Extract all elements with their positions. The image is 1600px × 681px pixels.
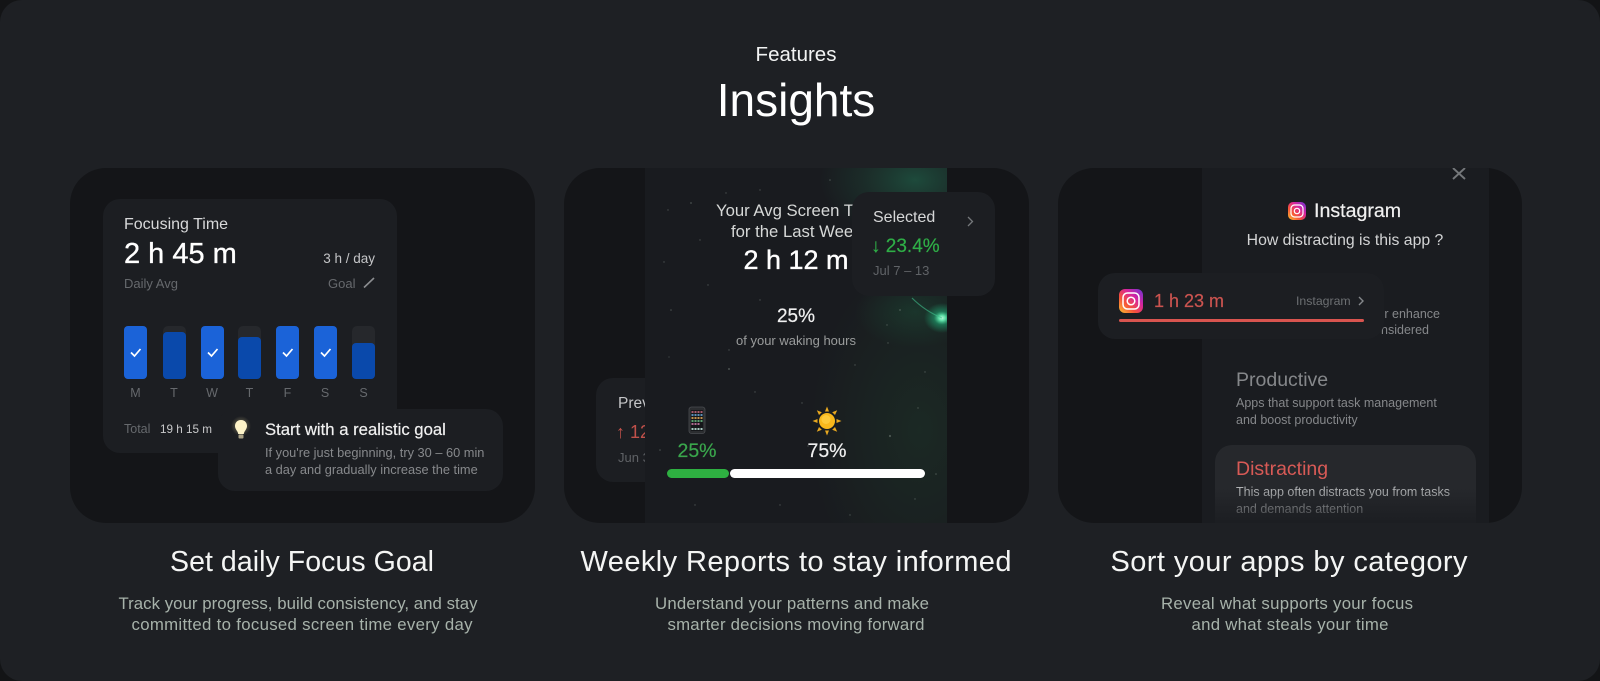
label: Daily Avg: Daily Avg [124,276,178,291]
bar chart: weekly focus: T [246,386,254,400]
option text: neutral fragment: nsidered [1381,323,1429,337]
icon: light bulb [232,417,250,438]
option text: neutral fragment: r enhance [1384,307,1440,321]
label: Goal: Goal [328,276,356,291]
label: waking hours: of your waking hours [736,333,856,348]
panel: previous week widget [596,378,645,482]
caption: weekly reports [580,546,1012,634]
stat: rest share: 75% [807,440,847,462]
tip heading: Start with a realistic goal [265,420,446,439]
label: Instagram: Instagram [1296,294,1351,308]
icon: chevron [968,217,972,226]
option: Productive [1236,369,1437,427]
icon: instagram small [1288,202,1306,220]
bar chart: weekly focus: S [321,386,329,400]
option: Productive: Productive [1236,369,1328,391]
usage line [1119,319,1364,322]
stat: phone share: 25% [677,440,717,462]
caption: focus goal [118,546,478,634]
stat: goal value: 3 h / day [323,251,375,266]
icon: close [1453,168,1465,179]
bar chart: weekly focus: S [359,386,368,400]
panel: selected week widget: Selected [873,209,935,226]
stat: change percent: ↓ 23.4% [871,236,940,257]
option: Productive: and boost productivity [1236,413,1358,427]
panel: previous week widget: Prev [618,395,650,412]
bar chart: weekly focus: M [130,386,141,400]
option: Productive: Apps that support task management [1236,396,1437,410]
panel: phone screen [1215,168,1476,523]
caption: app categories: Reveal what supports your focus [1161,594,1413,613]
caption: focus goal: Track your progress, build consistency, and stay [118,594,478,613]
stat: 25 percent: 25% [777,306,815,327]
panel: selected week widget [852,192,995,296]
bar chart: weekly focus [124,326,375,400]
icon: pencil [364,278,374,288]
panel: previous week widget: ↑ 12 [616,422,650,442]
question text: How distracting is this app ? [1247,232,1444,249]
option: Distracting selected: Distracting [1236,458,1328,480]
panel: focusing time widget [103,199,397,453]
bar chart: weekly focus: F [284,386,292,400]
icon: chevron [1359,297,1363,305]
caption: weekly reports: smarter decisions moving forward [668,615,924,634]
tip body: If you're just beginning, try 30 – 60 min [265,445,484,460]
icon: instagram [1119,289,1143,313]
heading: avg screen time: Your Avg Screen Time [716,201,880,220]
bar chart: weekly focus: T [170,386,178,400]
option: Distracting selected [1215,445,1476,513]
label: Total: Total [124,422,150,436]
option: Distracting selected: This app often distracts you from tasks [1236,485,1450,499]
icon: phone [689,407,705,434]
caption: app categories: and what steals your time [1192,615,1388,634]
heading: Focusing Time: Focusing Time [124,216,228,233]
section eyebrow: Features: Features [756,43,836,66]
icon: sun [812,406,842,436]
label: date range: Jul 7 – 13 [873,263,929,278]
caption: app categories: Sort your apps by category [1110,546,1468,578]
stat: app time: 1 h 23 m [1154,291,1224,311]
caption: focus goal: Set daily Focus Goal [170,546,434,578]
caption: app categories [1110,546,1468,634]
panel: previous week widget: Jun 3 [618,450,650,465]
stat: daily average: 2 h 45 m [124,238,237,270]
panel: focus goal card [70,168,535,523]
callout: realistic goal tip [218,409,503,491]
stat: 2 h 12 m: 2 h 12 m [743,245,849,275]
phone screen with nebula background [645,168,947,523]
caption: weekly reports: Weekly Reports to stay informed [580,546,1012,578]
stat: total time: 19 h 15 m [160,423,212,436]
panel: floating instagram usage row [1098,273,1384,339]
caption: focus goal: committed to focused screen time every day [132,615,473,634]
main title: Insights: Insights [717,74,875,126]
panel: weekly reports card [564,168,1029,523]
bar chart: weekly focus: W [206,386,218,400]
progress bar: screen vs rest [667,469,925,478]
caption: weekly reports: Understand your patterns and make [655,594,929,613]
panel: app category card [1058,168,1522,545]
heading: avg screen time: for the Last Week [731,222,862,241]
option: Distracting selected: and demands attention [1236,502,1363,516]
tip body: a day and gradually increase the time [265,462,478,477]
heading: Instagram: Instagram [1314,200,1401,222]
